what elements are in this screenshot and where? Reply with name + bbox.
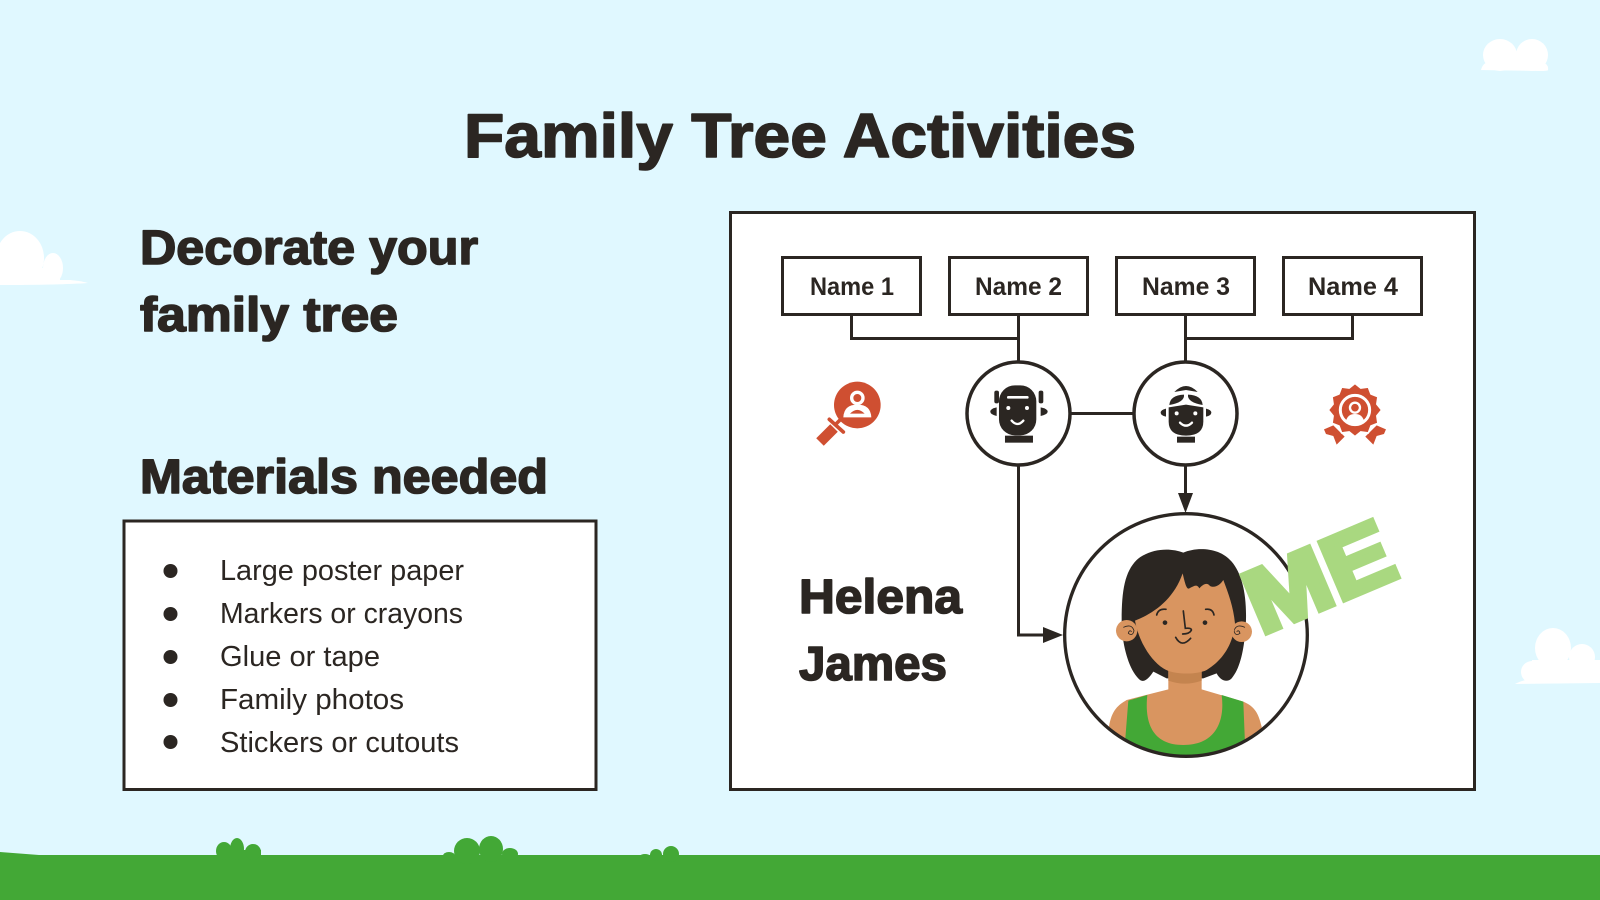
list item: glue or tape: Glue or tape xyxy=(220,641,380,673)
panel: family tree xyxy=(730,212,1474,790)
icon: magnifier with person xyxy=(820,382,881,442)
list item: markers or crayons: Markers or crayons xyxy=(220,598,463,630)
heading: decorate your family tree: family tree xyxy=(140,289,398,342)
cloud: top right xyxy=(1478,39,1548,71)
sticker: ME: ME xyxy=(1230,502,1409,653)
text: Helena James: James xyxy=(799,638,947,691)
heading: decorate your family tree xyxy=(140,222,478,342)
name box 1 xyxy=(782,258,920,314)
shoulders xyxy=(1109,670,1262,745)
name box 4: Name 4 xyxy=(1308,273,1398,301)
hair back xyxy=(1122,549,1246,681)
face xyxy=(1135,573,1235,674)
cloud: left xyxy=(0,231,88,285)
ears xyxy=(1116,620,1137,641)
title: Family Tree Activities xyxy=(464,102,1136,171)
name box 2: Name 2 xyxy=(975,273,1062,301)
name box 3: Name 3 xyxy=(1142,273,1230,301)
facial features xyxy=(1157,609,1214,643)
text: Helena James: Helena xyxy=(799,571,962,624)
name box 3 xyxy=(1116,258,1254,314)
list item: family photos: Family photos xyxy=(220,684,404,716)
cloud: right xyxy=(1515,628,1600,684)
green top xyxy=(1125,695,1245,755)
name box 4 xyxy=(1284,258,1422,314)
name box 1: Name 1 xyxy=(810,273,894,301)
name box 2 xyxy=(950,258,1088,314)
icon: award badge with person xyxy=(1324,383,1386,445)
list item: large poster paper: Large poster paper xyxy=(220,555,464,587)
connector lines xyxy=(852,314,1352,635)
text: Helena James xyxy=(799,571,962,691)
heading: materials needed: Materials needed xyxy=(140,451,548,504)
panel: materials list xyxy=(124,521,596,790)
icon: parent 2 circle xyxy=(1134,362,1237,465)
icon: parent 1 circle xyxy=(967,362,1070,465)
portrait: Helena xyxy=(1065,514,1307,763)
heading: decorate your family tree: Decorate your xyxy=(140,222,478,275)
arrow: into portrait from left xyxy=(1043,627,1063,643)
arrow: into portrait from top xyxy=(1178,493,1193,513)
ground with bushes xyxy=(0,836,1600,900)
list item: stickers or cutouts: Stickers or cutouts xyxy=(220,727,459,759)
